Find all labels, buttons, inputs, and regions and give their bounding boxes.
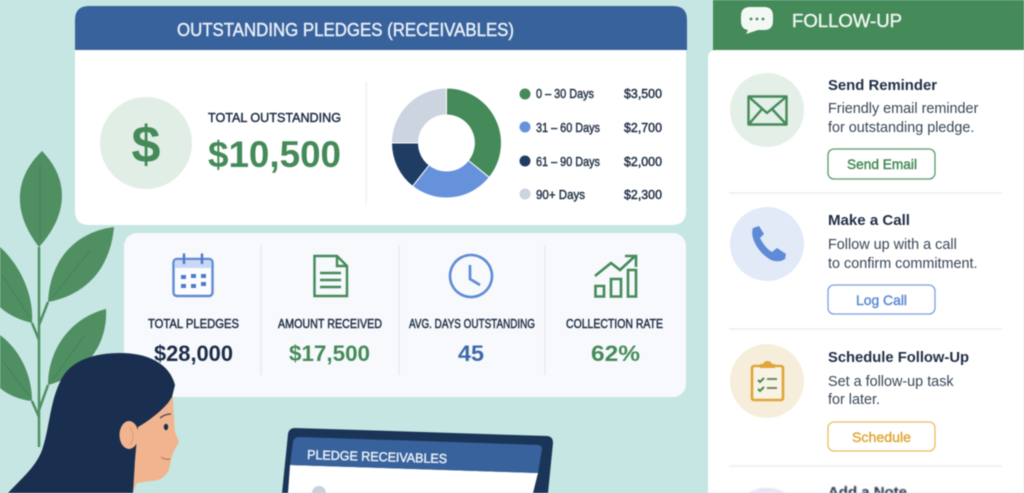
icon: clock [450, 255, 492, 297]
panel: follow-up [708, 0, 1024, 493]
action description: Friendly email reminder [828, 101, 979, 117]
laptop screen title: PLEDGE RECEIVABLES [307, 447, 448, 466]
legend: 31-60 days [520, 120, 662, 135]
action: add a note [750, 484, 908, 493]
stat label: AMOUNT RECEIVED [278, 317, 382, 331]
icon: dollar coin [100, 97, 192, 189]
stat label: COLLECTION RATE [566, 317, 663, 331]
stat: average days outstanding [409, 255, 535, 366]
total outstanding value: $10,500 [208, 134, 341, 175]
action description: to confirm commitment. [828, 256, 978, 272]
stat: amount received [278, 256, 382, 366]
legend: 90+ days: $2,300 [624, 187, 662, 202]
follow-up heading: FOLLOW-UP [792, 11, 902, 31]
action: send reminder [730, 73, 979, 179]
total outstanding label: TOTAL OUTSTANDING [208, 110, 341, 125]
stat label: AVG. DAYS OUTSTANDING [409, 317, 535, 331]
stat: collection rate [566, 256, 663, 366]
legend: 0-30 days: $3,500 [624, 86, 662, 101]
legend: 31-60 days: $2,700 [624, 120, 662, 135]
action title: Schedule Follow-Up [828, 349, 969, 366]
action description: for later. [828, 392, 880, 408]
stat value: 62% [591, 341, 640, 366]
stat: total pledges [148, 254, 239, 366]
icon: calendar [174, 254, 212, 296]
legend: 61-90 days [520, 154, 662, 169]
action: make a call [730, 207, 978, 314]
follow-up header bar [713, 0, 1024, 52]
action title: Make a Call [828, 212, 910, 229]
icon: chat bubble [741, 7, 773, 34]
button: send email: Send Email [847, 156, 917, 172]
legend: 61-90 days: 61 – 90 Days [536, 155, 600, 169]
icon: clipboard [752, 361, 783, 400]
icon: document [314, 256, 347, 296]
button: schedule: Schedule [852, 429, 911, 445]
panel heading: OUTSTANDING PLEDGES (RECEIVABLES) [177, 20, 514, 40]
laptop illustration [282, 428, 553, 493]
icon: growth chart [595, 256, 636, 296]
icon: envelope [748, 96, 786, 124]
stat value: $17,500 [289, 341, 370, 366]
action description: for outstanding pledge. [828, 120, 974, 136]
stat value: $28,000 [154, 341, 233, 366]
legend: 90+ days [520, 187, 662, 202]
panel header bar [75, 6, 687, 50]
legend: 0-30 days: 0 – 30 Days [536, 87, 594, 101]
panel: outstanding pledges [75, 6, 687, 225]
button: log call: Log Call [856, 292, 907, 308]
stat value: 45 [458, 341, 484, 366]
legend: 0-30 days [520, 86, 662, 101]
action title: Send Reminder [828, 77, 937, 94]
button: log call [828, 285, 935, 314]
action: schedule follow-up [730, 344, 969, 451]
legend: 61-90 days: $2,000 [624, 154, 662, 169]
button: schedule [828, 422, 935, 451]
icon: dollar coin: $ [132, 116, 161, 174]
legend: 90+ days: 90+ Days [536, 188, 585, 202]
legend: 31-60 days: 31 – 60 Days [536, 121, 600, 135]
panel: summary stats [124, 233, 686, 397]
plant illustration [0, 151, 114, 447]
panel body [75, 50, 686, 225]
follow-up body [708, 50, 1024, 493]
action description: Follow up with a call [828, 237, 957, 253]
woman illustration [8, 353, 179, 493]
action description: Set a follow-up task [828, 374, 954, 390]
button: send email [828, 149, 935, 179]
icon: phone [752, 226, 786, 261]
stat label: TOTAL PLEDGES [148, 317, 239, 331]
donut chart: aging buckets [391, 88, 501, 198]
